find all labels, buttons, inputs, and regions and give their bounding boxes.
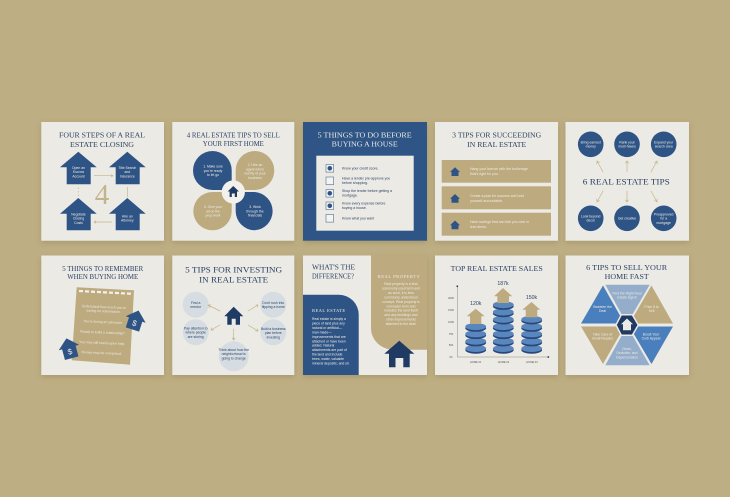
text: real property: commonly used term and bbox=[382, 286, 420, 290]
icon: house bbox=[384, 341, 414, 367]
band 2: yourself accountable. bbox=[470, 199, 503, 203]
y axis labels bbox=[448, 296, 454, 359]
topic circles bbox=[183, 292, 286, 371]
heading: 4 tips: 4 REAL ESTATE TIPS TO SELL bbox=[187, 130, 280, 140]
petal: tip 4: through the bbox=[246, 209, 264, 213]
segment: find agent: Estate Agent bbox=[617, 296, 637, 300]
segment: boost curb appeal: Curb Appeal bbox=[642, 337, 661, 341]
house step: negotiate closing costs: Closing bbox=[73, 217, 84, 221]
segment: price it to sell: Sell bbox=[649, 309, 655, 313]
house step: negotiate closing costs: Costs bbox=[74, 221, 83, 225]
segment: find agent: Find the Right Real bbox=[612, 292, 642, 296]
y axis labels: 750 bbox=[449, 332, 454, 336]
blue card: real estate: REAL ESTATE bbox=[312, 308, 346, 313]
petal: tip 2: agent who's bbox=[246, 167, 264, 171]
blue card: real estate: trees, water, valuable bbox=[312, 357, 344, 361]
tip circles: search area bbox=[655, 145, 673, 149]
tip circles: must-haves bbox=[618, 145, 636, 149]
panel: 3 tips for succeeding bbox=[435, 122, 558, 241]
value home 01: 120k bbox=[470, 301, 482, 307]
blue card: real estate: attachments are part of bbox=[312, 348, 347, 352]
house step: open an escrow account: Escrow bbox=[73, 170, 85, 174]
text: real property: other improvements bbox=[386, 318, 416, 322]
heading: 5 things: 5 THINGS TO DO BEFORE bbox=[318, 131, 412, 140]
topic circles: Find a bbox=[191, 301, 200, 305]
item 3 bbox=[326, 189, 392, 198]
text: real property: and any buildings and bbox=[384, 313, 418, 317]
topic circles: where people bbox=[186, 331, 206, 335]
text: real property: concept. Real property is bbox=[382, 300, 420, 304]
topic circles: mentor bbox=[190, 305, 202, 309]
tip circles: decor bbox=[586, 219, 596, 223]
band 3: lean times. bbox=[470, 225, 487, 229]
panel: 5 things to do before buying a house bbox=[303, 122, 427, 241]
x axis labels: HOME 01 bbox=[470, 360, 482, 364]
heading: sell fast bbox=[586, 263, 667, 281]
text: real property: attached to the land. bbox=[386, 322, 416, 326]
heading: 3 tips: IN REAL ESTATE bbox=[467, 140, 527, 149]
blue card: real estate bbox=[303, 295, 359, 375]
heading: remember: 5 THINGS TO REMEMBER bbox=[62, 264, 143, 273]
segment: sweeten the deal bbox=[581, 286, 624, 324]
tip circles: Get creative bbox=[618, 216, 636, 220]
topic circles: investing bbox=[267, 335, 280, 339]
y axis labels: 1000 bbox=[448, 320, 454, 324]
item 2: Have a lender pre-approve you bbox=[342, 176, 390, 180]
petal: tip 2 bbox=[236, 151, 274, 190]
item 2 bbox=[326, 176, 390, 185]
heading: four steps bbox=[59, 131, 146, 149]
icon: center house bbox=[224, 307, 243, 325]
panel: what's the difference bbox=[303, 256, 427, 375]
petal: tip 1: 1. Make sure bbox=[203, 164, 223, 168]
house step: hire an attorney bbox=[109, 198, 146, 230]
y axis labels: 500 bbox=[449, 343, 454, 347]
segment: price it to sell bbox=[630, 286, 673, 324]
tip circles: Preapproved bbox=[654, 212, 673, 216]
topic circles: are storing bbox=[188, 335, 204, 339]
band 3 bbox=[442, 213, 551, 236]
text: real property: a broader term and bbox=[387, 304, 416, 308]
panel: 6 real estate tips bbox=[566, 122, 689, 241]
topic circles: going to change bbox=[222, 356, 246, 360]
house step: open an escrow account: Open an bbox=[72, 166, 85, 170]
panel: 4 real estate tips bbox=[172, 122, 294, 241]
band 1: Hang your license with the brokerage bbox=[470, 167, 528, 171]
house step: hire an attorney: Attorney bbox=[121, 219, 134, 223]
text: real property: Real property is a less bbox=[384, 282, 418, 286]
panel: 5 tips for investing bbox=[172, 256, 294, 375]
arrows from heading to circles bbox=[597, 161, 657, 202]
heading: four steps: FOUR STEPS OF A REAL bbox=[59, 131, 146, 140]
paper note: Homes may be overpriced. bbox=[81, 350, 122, 356]
item 2: before shopping. bbox=[342, 181, 368, 185]
segment: take care of repairs: Small Repairs bbox=[592, 337, 613, 341]
blue card: real estate: natural or artificial— bbox=[312, 326, 343, 330]
house step: hire an attorney: Hire an bbox=[122, 214, 133, 218]
heading: 3 tips: 3 TIPS FOR SUCCEEDING bbox=[452, 131, 542, 140]
arrows from house bbox=[208, 305, 258, 340]
blue card: real estate: Real estate is simply a bbox=[312, 317, 346, 321]
text: real property: includes the land itself bbox=[384, 309, 418, 313]
blue card: real estate: mineral deposits, and oil. bbox=[312, 362, 350, 366]
band 3: Have savings that can tide you over in bbox=[470, 220, 529, 224]
bar chart: coin stacks bbox=[448, 281, 549, 364]
heading: what's the difference: WHAT'S THE bbox=[312, 263, 355, 272]
blue card: real estate: man-made— bbox=[312, 330, 332, 334]
topic circles: Pay attention to bbox=[184, 326, 207, 330]
icon: dollar house left: $ bbox=[67, 347, 74, 357]
heading: remember: WHEN BUYING HOME bbox=[67, 272, 139, 281]
item 3: Shop the lender before getting a bbox=[342, 189, 392, 193]
item 4 bbox=[326, 202, 385, 210]
house step: title search and insurance: Insurance bbox=[120, 174, 135, 178]
arrow home 03 bbox=[522, 302, 540, 317]
petal: tip 4 bbox=[236, 192, 273, 230]
heading: sell fast: HOME FAST bbox=[605, 272, 649, 281]
tip circles: Rank your bbox=[619, 140, 635, 144]
topic circles: flipping a home bbox=[262, 305, 285, 309]
heading: 4 tips bbox=[187, 130, 280, 148]
item 5: Know what you want bbox=[342, 216, 374, 220]
panel: four steps of a real estate closing bbox=[41, 122, 164, 241]
band 2 bbox=[442, 186, 551, 209]
segment: clean declutter depersonalize: Clean, bbox=[622, 347, 632, 351]
petal: tip 3: prep work bbox=[206, 214, 221, 218]
tip circles: mortgage bbox=[657, 221, 671, 225]
heading: 4 tips: YOUR FIRST HOME bbox=[203, 139, 264, 148]
text: real property: commonly understood bbox=[384, 295, 418, 299]
tip circles: for a bbox=[660, 217, 667, 221]
y axis labels: 00 bbox=[450, 355, 453, 359]
item 1: Know your credit score. bbox=[342, 166, 379, 170]
topic circles: neighborhood is bbox=[222, 352, 246, 356]
house step: open an escrow account bbox=[60, 152, 97, 184]
petal: tip 3 bbox=[193, 192, 232, 230]
topic circles: Don't rush into bbox=[262, 301, 284, 305]
heading: what's the difference: DIFFERENCE? bbox=[312, 272, 354, 281]
topic circles: plan before bbox=[265, 331, 282, 335]
heading: 5 things bbox=[318, 131, 412, 149]
petal: tip 3: all on the bbox=[206, 209, 220, 213]
segment: clean declutter depersonalize: Declutter, and bbox=[617, 351, 638, 355]
segment: clean declutter depersonalize bbox=[605, 326, 650, 365]
petal: tip 2: worthy of your bbox=[244, 172, 267, 176]
petal: tip 3: 4. Give your bbox=[204, 205, 222, 209]
tip circles: Expand your bbox=[654, 140, 673, 144]
heading: 3 tips bbox=[452, 131, 542, 149]
paper note: Ready to build a relationship? bbox=[80, 330, 125, 336]
x axis labels: HOME 03 bbox=[526, 360, 538, 364]
stack home 01 bbox=[465, 323, 486, 354]
blue card: real estate: the land and include bbox=[312, 353, 342, 357]
paper note bbox=[72, 287, 134, 365]
segment: boost curb appeal bbox=[630, 326, 673, 364]
heading: remember bbox=[62, 264, 143, 281]
tip circles: money bbox=[586, 145, 596, 149]
icon: dollar house right: $ bbox=[131, 318, 138, 328]
heading: sell fast: 6 TIPS TO SELL YOUR bbox=[586, 263, 667, 272]
tip circles bbox=[578, 132, 676, 231]
item 3: mortgage. bbox=[342, 194, 358, 198]
panel: 5 things to remember bbox=[41, 256, 164, 375]
house step: title search and insurance: and bbox=[124, 170, 130, 174]
heading: top sales: TOP REAL ESTATE SALES bbox=[451, 264, 543, 273]
text: real property: as such, it is less bbox=[388, 291, 414, 295]
house step: negotiate closing costs bbox=[60, 198, 97, 230]
blue card: real estate: added. Natural bbox=[312, 344, 334, 348]
heading: what's the difference bbox=[312, 263, 355, 281]
segment: find agent bbox=[605, 285, 650, 324]
number four: 4 bbox=[95, 179, 110, 211]
segment: clean declutter depersonalize: Depersonalize bbox=[616, 355, 638, 359]
item 4: Know every expense before bbox=[342, 202, 385, 206]
petal: tip 2: 2. Hire an bbox=[248, 163, 262, 167]
petal: tip 4: 3. Work bbox=[249, 205, 261, 209]
segment: boost curb appeal: Boost Your bbox=[643, 332, 659, 336]
band 1: that's right for you. bbox=[470, 172, 499, 176]
blue card: real estate: improvements that are bbox=[312, 335, 346, 339]
panel: 6 tips to sell your home fast bbox=[566, 256, 689, 375]
center circle with house icon bbox=[222, 180, 245, 204]
y axis labels: 2000 bbox=[448, 296, 454, 300]
house step: title search and insurance bbox=[109, 152, 146, 184]
petal: tip 1: to let go bbox=[207, 173, 219, 177]
band 1 bbox=[442, 160, 551, 183]
paper note: You're losing an advocate. bbox=[83, 319, 123, 325]
petal: tip 2: business bbox=[248, 176, 262, 180]
x axis labels: HOME 02 bbox=[498, 360, 510, 364]
x axis labels bbox=[470, 360, 538, 364]
heading: investing bbox=[185, 265, 282, 284]
blue card: real estate: attached or have been bbox=[312, 339, 346, 343]
checklist card bbox=[316, 156, 414, 231]
heading: 5 things: BUYING A HOUSE bbox=[332, 140, 398, 149]
heading: investing: IN REAL ESTATE bbox=[199, 275, 268, 284]
tip circles: Bring earnest bbox=[581, 140, 601, 144]
value home 02: 187k bbox=[497, 281, 509, 287]
heading: 6 tips: 6 REAL ESTATE TIPS bbox=[583, 177, 670, 186]
stack home 03 bbox=[521, 316, 542, 354]
segment: sweeten the deal: Deal bbox=[599, 309, 606, 313]
arrow home 01 bbox=[467, 309, 485, 324]
heading: real property: REAL PROPERTY bbox=[378, 274, 421, 279]
arrows between steps bbox=[78, 174, 127, 223]
paper note: Understand how much you're bbox=[82, 304, 126, 310]
band 2: Create a plan for success and hold bbox=[470, 194, 524, 198]
petal: tip 1: you're ready bbox=[204, 169, 223, 173]
segment: take care of repairs: Take Care of bbox=[593, 332, 612, 336]
value home 03: 150k bbox=[526, 295, 538, 301]
tan curved area: real property bbox=[371, 256, 427, 350]
segment: sweeten the deal: Sweeten the bbox=[593, 305, 612, 309]
y axis labels: 1500 bbox=[448, 308, 454, 312]
segment: price it to sell: Price It to bbox=[644, 305, 659, 309]
house step: negotiate closing costs: Negotiate bbox=[71, 212, 86, 216]
panel: top real estate sales bbox=[435, 256, 558, 375]
axes bbox=[457, 286, 548, 357]
heading: four steps: ESTATE CLOSING bbox=[70, 140, 135, 149]
item 4: buying a house. bbox=[342, 206, 367, 210]
house step: open an escrow account: Account bbox=[72, 174, 85, 178]
house step: title search and insurance: Title Search bbox=[118, 166, 136, 170]
center hexagon with house bbox=[616, 315, 638, 335]
paper note: You may still need expert help. bbox=[79, 340, 125, 346]
arrow home 02 bbox=[494, 288, 512, 303]
blue card: real estate: piece of land plus any bbox=[312, 321, 345, 325]
petal: tip 1 bbox=[193, 151, 232, 190]
topic circles: Build a business bbox=[261, 327, 286, 331]
hexagon segments bbox=[581, 285, 673, 365]
paper note: saving on commission. bbox=[86, 309, 121, 314]
tip circles: Look beyond bbox=[581, 214, 600, 218]
segment: take care of repairs bbox=[581, 326, 624, 364]
stack home 02 bbox=[493, 301, 514, 354]
petal: tip 4: financials bbox=[248, 214, 262, 218]
topic circles: Think about how the bbox=[218, 348, 249, 352]
heading: investing: 5 TIPS FOR INVESTING bbox=[185, 265, 282, 274]
